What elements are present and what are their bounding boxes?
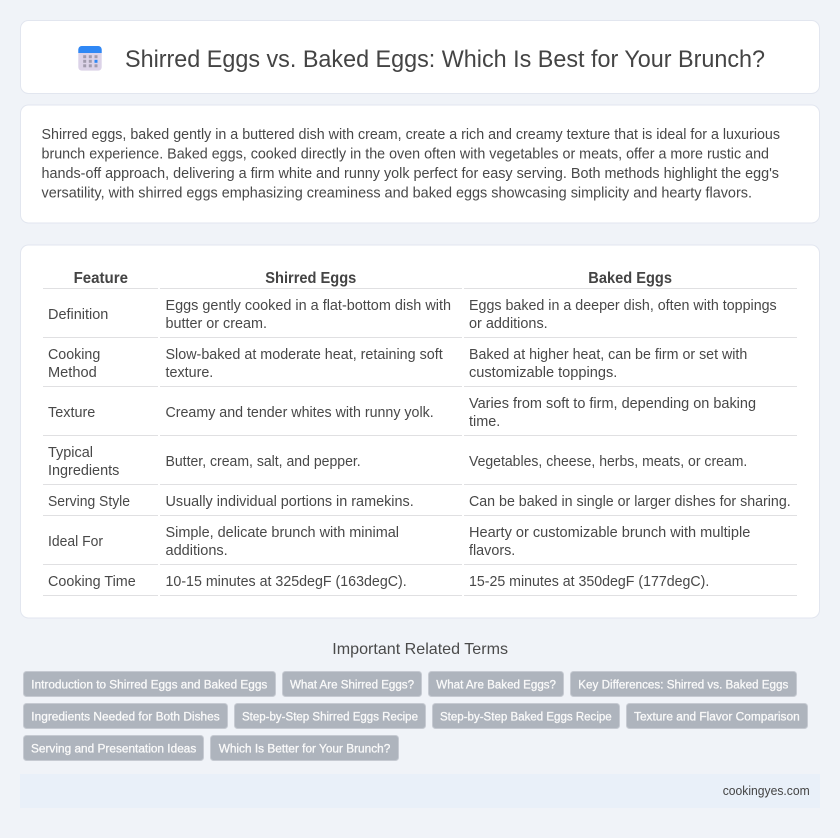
- related terms tags: Key Differences: Shirred vs. Baked Eggs: [578, 677, 788, 691]
- table header row: [74, 270, 672, 287]
- row: definition: or additions.: [469, 316, 548, 332]
- row: serving style: Usually individual portions in ramekins.: [166, 494, 414, 510]
- intro paragraph: brunch experience. Baked eggs, cooked directly in the oven often with vegetables or meats, offer a more rustic and: [42, 146, 769, 162]
- row: cooking time: 15-25 minutes at 350degF (177degC).: [469, 574, 709, 590]
- intro paragraph: Shirred eggs, baked gently in a buttered dish with cream, create a rich and creamy texture that is ideal for a luxurious: [42, 127, 780, 143]
- intro paragraph: versatility, with shirred eggs emphasizing creaminess and baked eggs showcasing simplicity and hearty flavors.: [42, 186, 752, 202]
- related terms tags: [24, 672, 808, 760]
- related terms tags: Texture and Flavor Comparison: [634, 709, 800, 723]
- row: definition: Eggs baked in a deeper dish, often with toppings: [469, 298, 777, 314]
- related terms tags: What Are Baked Eggs?: [436, 677, 556, 691]
- row: serving style: [48, 494, 791, 510]
- row: ideal for: Hearty or customizable brunch with multiple: [469, 525, 750, 541]
- related terms tags: Serving and Presentation Ideas: [31, 741, 196, 755]
- header panel: [20, 20, 820, 94]
- row: ideal for: Simple, delicate brunch with minimal: [166, 525, 399, 541]
- related terms tags: What Are Shirred Eggs?: [290, 677, 414, 691]
- row: texture: Creamy and tender whites with runny yolk.: [166, 405, 434, 421]
- related terms tags: Introduction to Shirred Eggs and Baked Eggs: [31, 677, 267, 691]
- row: cooking time: [48, 574, 709, 590]
- row: cooking method: Cooking: [48, 347, 100, 363]
- row: cooking method: Slow-baked at moderate heat, retaining soft: [166, 347, 443, 363]
- icon: calendar: [78, 46, 102, 71]
- row: cooking method: texture.: [166, 365, 213, 381]
- intro paragraph: [42, 127, 780, 202]
- table header row: Feature: [74, 270, 128, 287]
- row: cooking time: 10-15 minutes at 325degF (163degC).: [166, 574, 407, 590]
- footer: [20, 774, 820, 808]
- title: Shirred Eggs vs. Baked Eggs: Which Is Best for Your Brunch?: [125, 46, 765, 73]
- row: cooking method: Baked at higher heat, can be firm or set with: [469, 347, 747, 363]
- row: cooking time: Cooking Time: [48, 574, 136, 590]
- row: typical ingredients: Butter, cream, salt, and pepper.: [166, 454, 361, 470]
- intro paragraph: hands-off approach, delivering a firm white and runny yolk perfect for easy serving. Both methods highlight the egg's: [42, 166, 779, 182]
- panel: comparison table: [20, 245, 820, 618]
- footer: cookingyes.com: [723, 784, 810, 798]
- row: cooking method: Method: [48, 365, 97, 381]
- row: texture: [48, 396, 756, 430]
- row: typical ingredients: Ingredients: [48, 463, 119, 479]
- row: typical ingredients: [48, 445, 747, 479]
- row: texture: time.: [469, 414, 500, 430]
- related terms tags: Step-by-Step Baked Eggs Recipe: [440, 709, 612, 723]
- row: definition: Definition: [48, 307, 108, 323]
- row: typical ingredients: Typical: [48, 445, 93, 461]
- row: serving style: Can be baked in single or larger dishes for sharing.: [469, 494, 791, 510]
- related terms tags: Which Is Better for Your Brunch?: [219, 741, 390, 755]
- related terms heading: Important Related Terms: [332, 641, 508, 658]
- row: cooking method: customizable toppings.: [469, 365, 617, 381]
- row: texture: Varies from soft to firm, depending on baking: [469, 396, 756, 412]
- row: cooking method: [48, 347, 747, 381]
- related terms tags: Ingredients Needed for Both Dishes: [31, 709, 220, 723]
- table header row: Shirred Eggs: [265, 270, 356, 287]
- row: typical ingredients: Vegetables, cheese, herbs, meats, or cream.: [469, 454, 747, 470]
- row: ideal for: additions.: [166, 543, 228, 559]
- row: ideal for: flavors.: [469, 543, 515, 559]
- row: serving style: Serving Style: [48, 494, 130, 510]
- related terms tags: Step-by-Step Shirred Eggs Recipe: [242, 709, 418, 723]
- row: definition: Eggs gently cooked in a flat-bottom dish with: [166, 298, 451, 314]
- panel: introduction: [20, 105, 820, 223]
- table header row: Baked Eggs: [588, 270, 672, 287]
- row: definition: [48, 298, 777, 332]
- row: ideal for: [48, 525, 750, 559]
- row: ideal for: Ideal For: [48, 534, 103, 550]
- row: texture: Texture: [48, 405, 95, 421]
- row: definition: butter or cream.: [166, 316, 267, 332]
